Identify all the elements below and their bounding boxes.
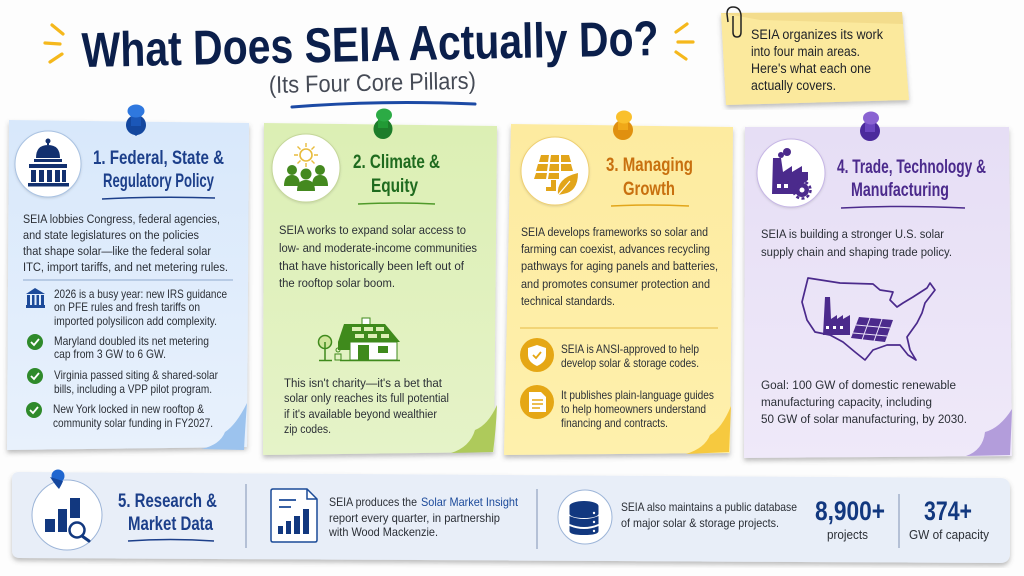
icon: check — [27, 334, 43, 350]
note text: SEIA organizes its work — [751, 27, 883, 42]
bullet: Maryland: cap from 3 GW to 6 GW. — [54, 347, 166, 361]
panel: federal policy — [7, 104, 249, 450]
bullet: New York — [53, 402, 213, 430]
goal text — [761, 378, 967, 426]
closing text: This isn't charity—it's a bet that — [284, 376, 443, 390]
report text: report every quarter, in partnership — [329, 511, 500, 525]
heading — [353, 152, 440, 197]
ANSI text — [561, 342, 699, 370]
subtitle: (Its Four Core Pillars) — [269, 68, 476, 99]
icon: purple pin — [860, 112, 880, 141]
icon: US map with factory and panels — [802, 278, 935, 360]
subtitle underline — [292, 103, 475, 107]
body text: supply chain and shaping trade policy. — [761, 245, 952, 259]
icon: factory and gear — [757, 139, 825, 207]
icon: green pin — [374, 108, 392, 139]
icon: database — [558, 490, 612, 544]
note: intro — [721, 7, 909, 105]
report text: with Wood Mackenzie. — [328, 525, 438, 539]
stat: capacity: GW of capacity — [909, 528, 990, 542]
report text — [328, 495, 519, 539]
database text: of major solar & storage projects. — [621, 516, 779, 530]
body text: SEIA develops frameworks so solar and — [521, 225, 708, 239]
note text: into four main areas. — [751, 44, 860, 59]
body text: and promotes consumer protection and — [521, 277, 710, 291]
body text: farming can coexist, advances recycling — [521, 242, 710, 256]
report text: SEIA produces the — [329, 495, 417, 509]
icon: document — [520, 385, 554, 419]
bullet: Virginia: bills, including a VPP pilot program. — [54, 382, 212, 396]
report text: Solar Market Insight — [421, 495, 519, 509]
bullet: New York: New York locked in new rooftop & — [53, 402, 204, 416]
panel: climate and equity — [263, 108, 497, 455]
heading: Manufacturing — [851, 180, 949, 201]
body text — [521, 225, 718, 308]
heading — [93, 148, 224, 192]
panel: managing growth — [504, 110, 733, 455]
body text — [761, 227, 952, 259]
heading: 3. Managing — [606, 155, 693, 176]
goal text: manufacturing capacity, including — [761, 395, 932, 409]
body text: SEIA lobbies Congress, federal agencies, — [23, 212, 220, 226]
heading — [837, 157, 986, 201]
icon: report document — [271, 489, 317, 542]
bullet: 2026 text: imported polysilicon add complexity. — [54, 314, 217, 328]
bullet: 2026 text: on PFE rules and fresh tariffs on — [54, 300, 200, 314]
icon: blue pin — [126, 104, 146, 136]
closing text — [284, 376, 449, 436]
icon: capitol in circle — [15, 131, 81, 197]
database text — [621, 500, 797, 530]
icon: bars and magnifier — [32, 480, 102, 550]
body text: SEIA is building a stronger U.S. solar — [761, 227, 944, 241]
heading: Regulatory Policy — [103, 171, 214, 192]
body text: ITC, import tariffs, and net metering rules. — [23, 260, 228, 274]
note text — [751, 27, 883, 93]
body text — [279, 223, 477, 290]
body text: technical standards. — [521, 294, 615, 308]
guides text: It publishes plain-language guides — [561, 388, 714, 402]
bullet: Virginia: Virginia passed siting & shared-solar — [54, 368, 218, 382]
guides text: financing and contracts. — [561, 416, 668, 430]
body text: that shape solar—like the federal solar — [23, 244, 211, 258]
heading: 5. Research & — [118, 491, 217, 512]
icon: solar house — [318, 318, 400, 360]
body text: that have historically been left out of — [279, 259, 465, 273]
heading: Growth — [623, 179, 675, 200]
bullet: New York: community solar funding in FY2027. — [53, 416, 213, 430]
body text: pathways for aging panels and batteries, — [521, 259, 718, 273]
heading: Market Data — [128, 514, 213, 535]
bullet: Maryland — [54, 334, 209, 361]
stat: capacity — [909, 496, 990, 542]
bullet: 2026 text — [54, 287, 227, 328]
stat: projects: 8,900+ — [815, 496, 885, 526]
stat: projects — [815, 496, 885, 542]
icon: check — [26, 402, 42, 418]
bullet: 2026 text: 2026 is a busy year: new IRS guidance — [54, 287, 227, 301]
heading: Equity — [371, 176, 418, 197]
body text: SEIA works to expand solar access to — [279, 223, 466, 237]
icon: solar panel and leaf — [521, 137, 589, 205]
title: What Does SEIA Actually Do? — [81, 12, 659, 78]
stat: capacity: 374+ — [924, 496, 972, 526]
sun sparks left — [45, 25, 63, 62]
icon: blue pin — [50, 470, 64, 489]
goal text: Goal: 100 GW of domestic renewable — [761, 378, 956, 392]
heading — [118, 491, 217, 535]
note text: actually covers. — [751, 78, 836, 93]
bullet: Maryland: Maryland doubled its net metering — [54, 334, 209, 348]
icon: paperclip — [727, 7, 741, 37]
page curl — [451, 405, 497, 453]
stat: projects: projects — [827, 528, 868, 542]
icon: shield — [520, 338, 554, 372]
heading: 2. Climate & — [353, 152, 440, 173]
closing text: solar only reaches its full potential — [284, 391, 449, 405]
icon: community and sun — [272, 134, 340, 202]
guides text: to help homeowners understand — [561, 402, 706, 416]
page curl — [201, 403, 247, 450]
body text: and state legislatures on the policies — [23, 228, 199, 242]
icon: check — [27, 368, 43, 384]
body text — [23, 212, 228, 274]
heading — [606, 155, 693, 200]
heading: 1. Federal, State & — [93, 148, 224, 169]
page curl — [966, 409, 1012, 456]
note text: Here's what each one — [751, 61, 871, 76]
ANSI text: develop solar & storage codes. — [561, 356, 699, 370]
body text: the rooftop solar boom. — [279, 276, 395, 290]
closing text: zip codes. — [284, 422, 331, 436]
goal text: 50 GW of solar manufacturing, by 2030. — [761, 412, 967, 426]
bullet: 2026 icon — [26, 288, 45, 308]
ANSI text: SEIA is ANSI-approved to help — [561, 342, 699, 356]
guides text — [561, 388, 714, 430]
panel: trade technology manufacturing — [744, 112, 1012, 458]
database text: SEIA also maintains a public database — [621, 500, 797, 514]
closing text: if it's available beyond wealthier — [284, 407, 437, 421]
page curl — [686, 406, 731, 454]
sun sparks right — [676, 24, 693, 59]
panel: research and market data — [12, 470, 1010, 563]
icon: yellow pin — [613, 110, 633, 140]
body text: low- and moderate-income communities — [279, 241, 477, 255]
bullet: Virginia — [54, 368, 218, 396]
